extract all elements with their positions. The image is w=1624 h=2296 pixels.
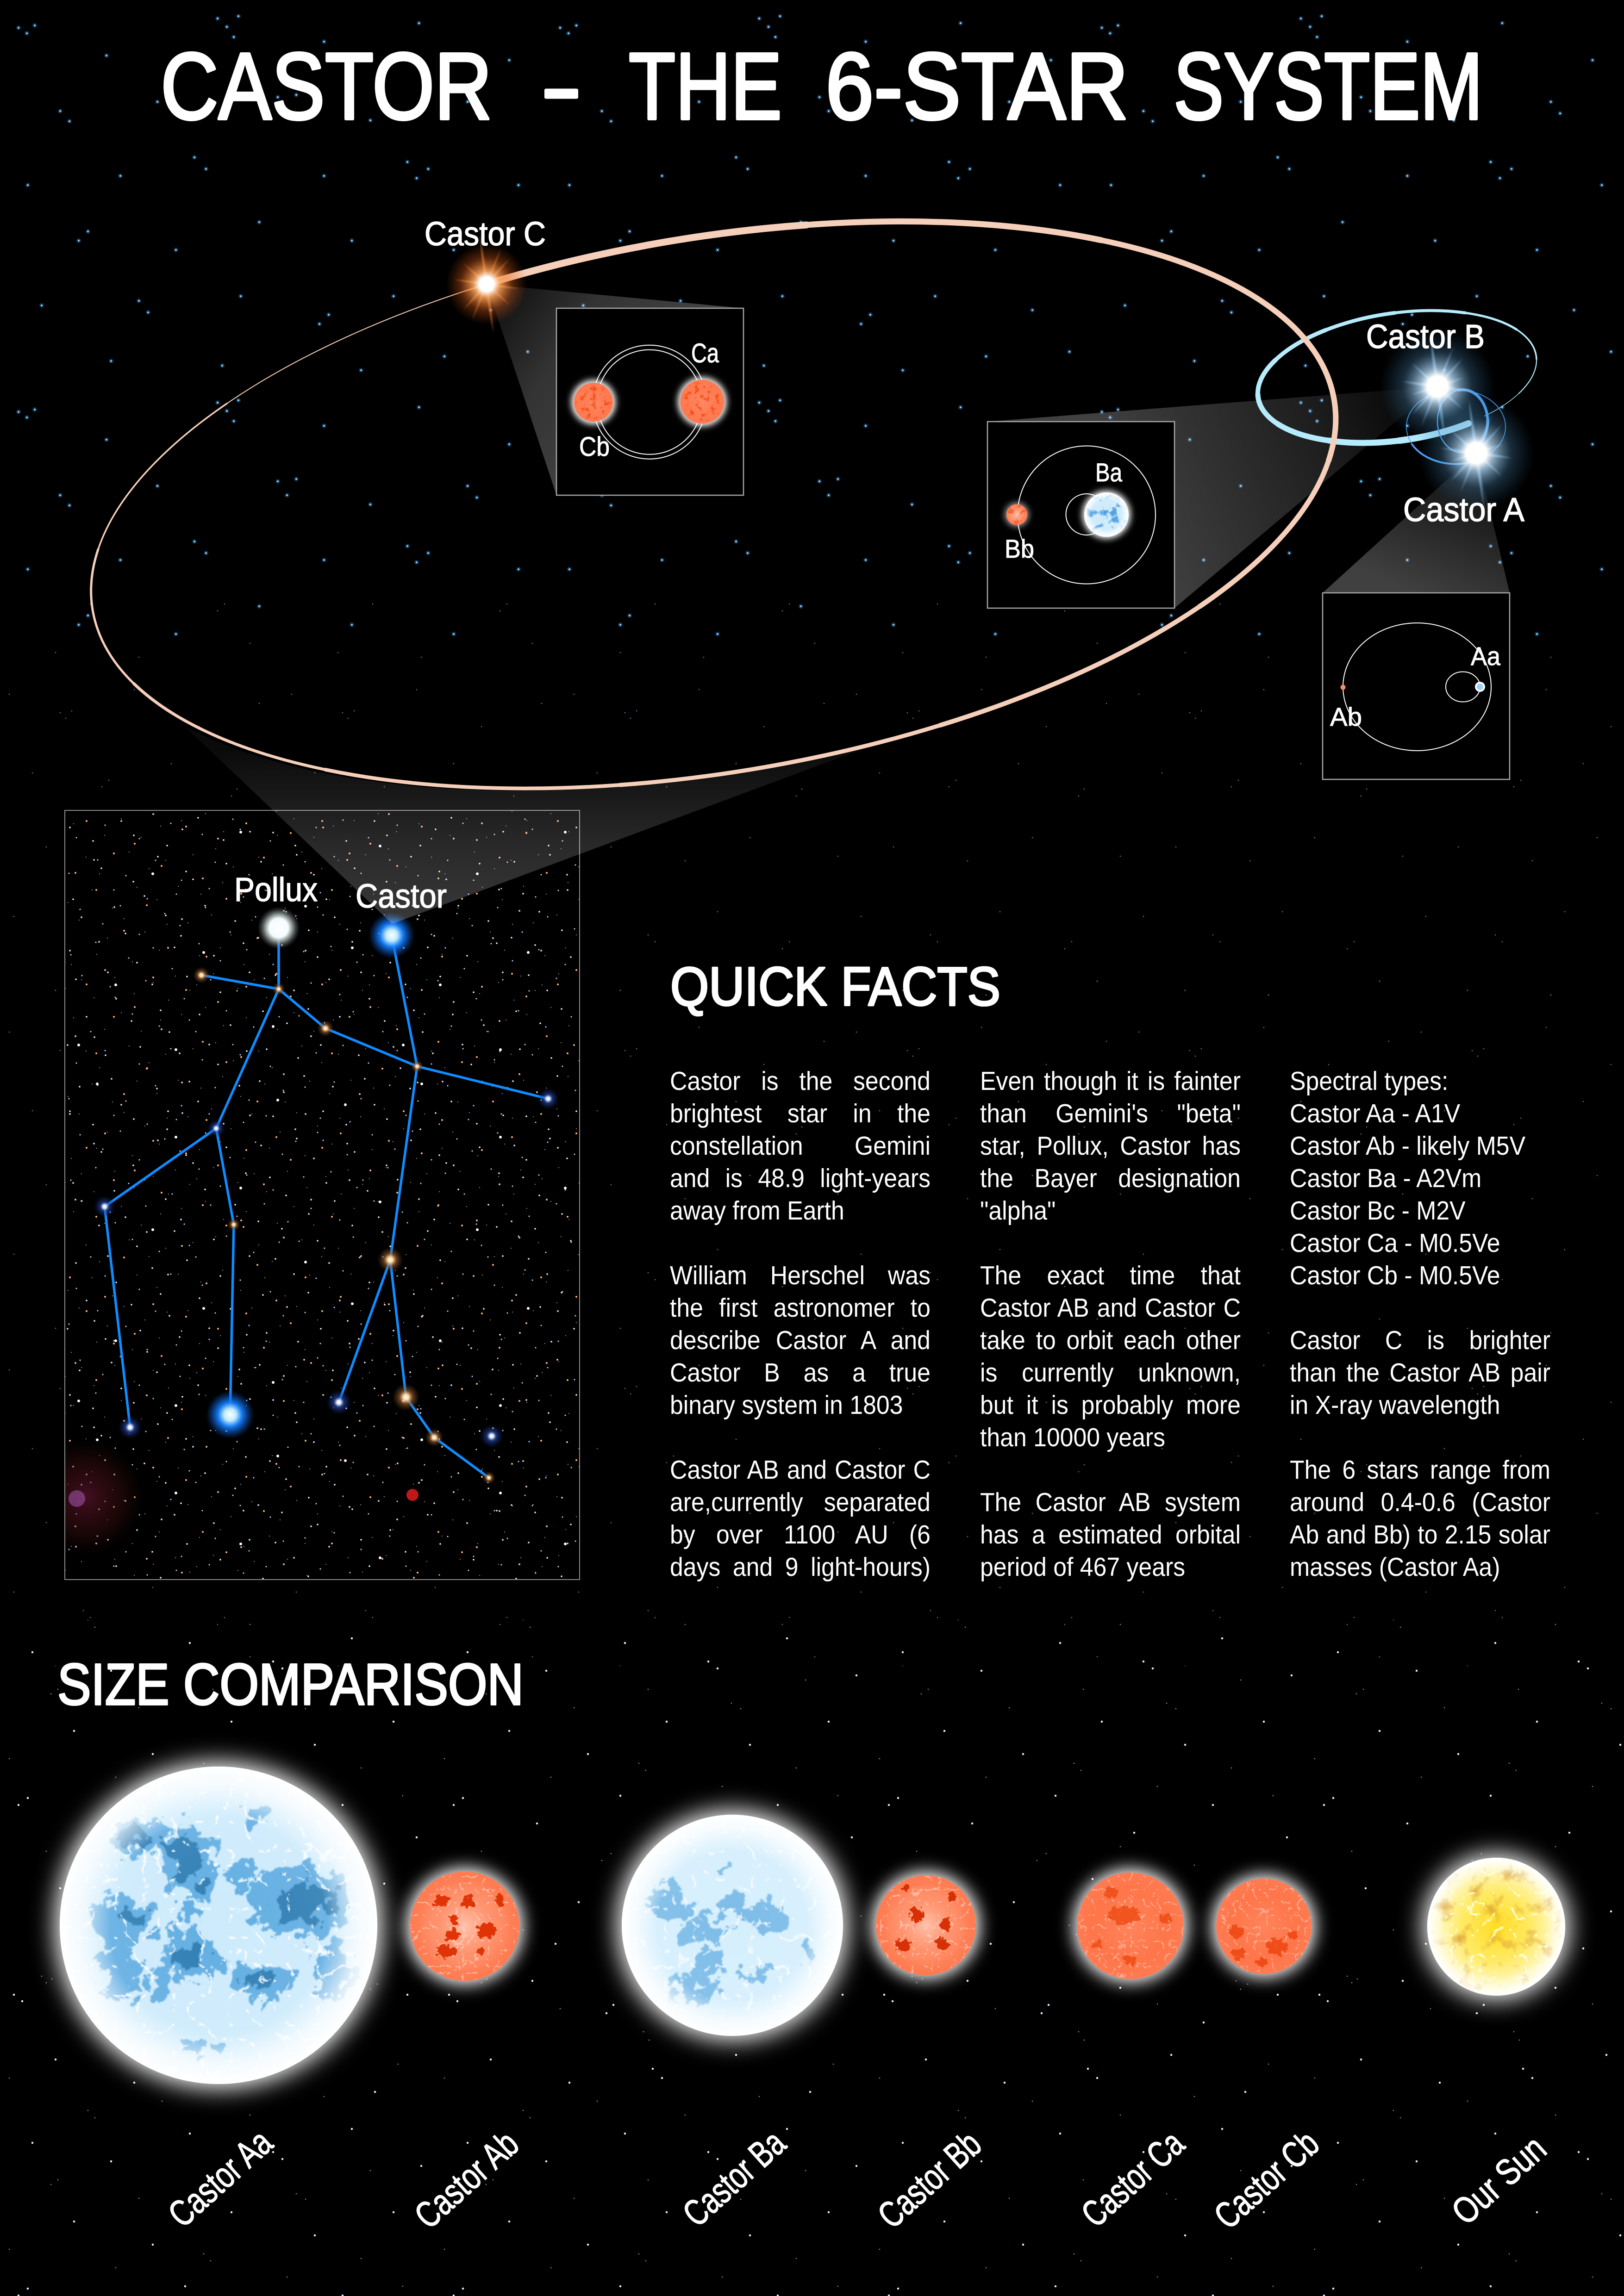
label: Ab: Ab	[1330, 702, 1362, 731]
star: Castor B glare	[1380, 329, 1495, 444]
column 1: away from Earth	[670, 1196, 844, 1226]
star: Our Sun	[1424, 1854, 1569, 1999]
column 2: period of 467 years	[980, 1552, 1185, 1582]
column 3: Castor Ca - M0.5Ve	[1290, 1228, 1500, 1258]
column 2: star, Pollux, Castor has	[980, 1131, 1241, 1161]
bright stars on the map	[94, 907, 559, 1484]
label: Castor Aa: Castor Aa	[160, 2121, 280, 2235]
zoom cone: Castor B to inset	[987, 386, 1437, 608]
zoom cone: Castor in star map to the orbit diagram	[185, 727, 880, 924]
column 3: in X-ray wavelength	[1290, 1390, 1500, 1420]
heading: Size Comparison: SIZE COMPARISON	[57, 1652, 524, 1717]
constellation lines	[105, 928, 548, 1478]
darker surface patches	[119, 1830, 333, 1989]
title: 6-STAR	[825, 33, 1129, 139]
column 2: Even though it is fainter	[980, 1066, 1241, 1096]
label: Our Sun: Our Sun	[1444, 2128, 1554, 2233]
column 1: binary system in 1803	[670, 1390, 903, 1420]
column 3: around 0.4-0.6 (Castor	[1290, 1487, 1550, 1517]
star: Castor Bb	[872, 1872, 980, 1979]
column 2: than Gemini's "beta"	[980, 1099, 1241, 1128]
inset panel: Castor C pair	[556, 308, 743, 495]
title	[161, 33, 1483, 139]
column 2: take to orbit each other	[980, 1325, 1241, 1355]
nebula	[28, 1439, 418, 1555]
zoom cone: Castor A to inset	[1323, 453, 1510, 593]
label: Castor B: Castor B	[1366, 318, 1485, 355]
label: Pollux: Pollux	[234, 871, 318, 908]
column 1: William Herschel was	[670, 1261, 931, 1290]
star: Bb	[1006, 503, 1029, 526]
star: Castor C glare	[446, 235, 527, 334]
column 3: Castor Ab - likely M5V	[1290, 1131, 1525, 1161]
label: Castor Ba: Castor Ba	[675, 2122, 793, 2234]
inset panel: Castor B pair	[987, 422, 1174, 608]
star: Castor Ba	[618, 1811, 847, 2040]
orbits of Ba and Bb	[1018, 446, 1156, 584]
column 3: Castor Aa - A1V	[1290, 1099, 1460, 1128]
star: Castor Cb	[1212, 1875, 1315, 1978]
star: Aa	[1475, 682, 1485, 692]
label: Cb: Cb	[579, 432, 610, 462]
column 2: has a estimated orbital	[980, 1520, 1241, 1549]
title: -	[541, 33, 582, 139]
column 1: and is 48.9 light-years	[670, 1164, 931, 1193]
label: Castor Cb: Castor Cb	[1206, 2122, 1327, 2237]
column 2: the Bayer designation	[980, 1164, 1241, 1193]
column 3	[1290, 1065, 1550, 1583]
column 2	[980, 1065, 1241, 1583]
column 2: "alpha"	[980, 1196, 1056, 1226]
red spots	[895, 1885, 956, 1951]
column 3: Spectral types:	[1290, 1066, 1448, 1096]
label: Bb: Bb	[1005, 534, 1034, 563]
star: Castor Ca	[1074, 1869, 1187, 1983]
orbits of Aa and Ab	[1343, 623, 1491, 751]
column 1: the first astronomer to	[670, 1293, 931, 1323]
label: Castor Ab: Castor Ab	[406, 2123, 526, 2236]
column 3: Ab and Bb) to 2.15 solar	[1290, 1520, 1550, 1549]
column 3: masses (Castor Aa)	[1290, 1552, 1500, 1582]
column 2: but it is probably more	[980, 1390, 1241, 1420]
label: Ba: Ba	[1095, 458, 1123, 487]
text block: quick facts columns	[670, 1065, 1550, 1583]
column 3: The 6 stars range from	[1290, 1455, 1550, 1485]
star: Ca	[678, 377, 727, 426]
red spots	[434, 1895, 503, 1958]
column 3: Castor C is brighter	[1290, 1325, 1550, 1355]
zoom cone: Castor C to inset	[487, 284, 743, 495]
column 1: are,currently separated	[670, 1487, 931, 1517]
orange-red spots	[1228, 1925, 1299, 1966]
star: Castor A glare	[1418, 395, 1534, 511]
orange-red spots	[1093, 1888, 1170, 1965]
column 1: Castor B as a true	[670, 1358, 931, 1388]
column 3: Castor Ba - A2Vm	[1290, 1164, 1481, 1193]
title: SYSTEM	[1174, 33, 1483, 139]
column 2: Castor AB and Castor C	[980, 1293, 1241, 1323]
label: Castor C: Castor C	[425, 216, 546, 253]
column 1: days and 9 light-hours)	[670, 1552, 931, 1582]
orbit: Castor C (peach tapered ellipse)	[91, 221, 1336, 789]
column 2: The Castor AB system	[980, 1487, 1241, 1517]
column 1: brightest star in the	[670, 1099, 931, 1128]
label: Aa: Aa	[1471, 641, 1501, 671]
orbit: Castor A and B inner loops	[1406, 390, 1505, 464]
blue surface patches	[647, 1863, 815, 2002]
star: Castor Ab	[406, 1868, 523, 1985]
star: Castor Aa	[56, 1762, 381, 2088]
column 1: Castor is the second	[670, 1066, 931, 1096]
column 2: The exact time that	[980, 1261, 1241, 1290]
orbit: Castor B (blue tapered ellipse)	[1258, 311, 1537, 443]
column 3: Castor Cb - M0.5Ve	[1290, 1261, 1500, 1290]
column 2: than 10000 years	[980, 1423, 1165, 1452]
title: THE	[629, 33, 782, 139]
title: CASTOR	[161, 33, 492, 139]
blue surface patches	[92, 1804, 350, 2054]
orbits of Ca and Cb	[593, 345, 706, 459]
heading: Quick Facts: QUICK FACTS	[670, 956, 1000, 1017]
column 1: describe Castor A and	[670, 1325, 931, 1355]
label: Ca: Ca	[691, 338, 719, 368]
star: Ba	[1082, 491, 1131, 539]
column 3: than the Castor AB pair	[1290, 1358, 1550, 1388]
column 3: Castor Bc - M2V	[1290, 1196, 1466, 1226]
column 1: by over 1100 AU (6	[670, 1520, 931, 1549]
column 2: is currently unknown,	[980, 1358, 1241, 1388]
label: Castor Bb: Castor Bb	[870, 2123, 989, 2236]
label: Castor: Castor	[356, 878, 447, 915]
label: Castor Ca: Castor Ca	[1074, 2122, 1192, 2235]
label: Castor A: Castor A	[1403, 492, 1524, 529]
column 1: Castor AB and Castor C	[670, 1455, 931, 1485]
panel: Gemini constellation star map	[28, 810, 580, 1580]
star: Ab	[1341, 685, 1345, 690]
column 1	[670, 1065, 931, 1583]
inset panel: Castor A pair	[1323, 593, 1510, 779]
star: Cb	[571, 380, 616, 424]
column 1: constellation Gemini	[670, 1131, 931, 1161]
